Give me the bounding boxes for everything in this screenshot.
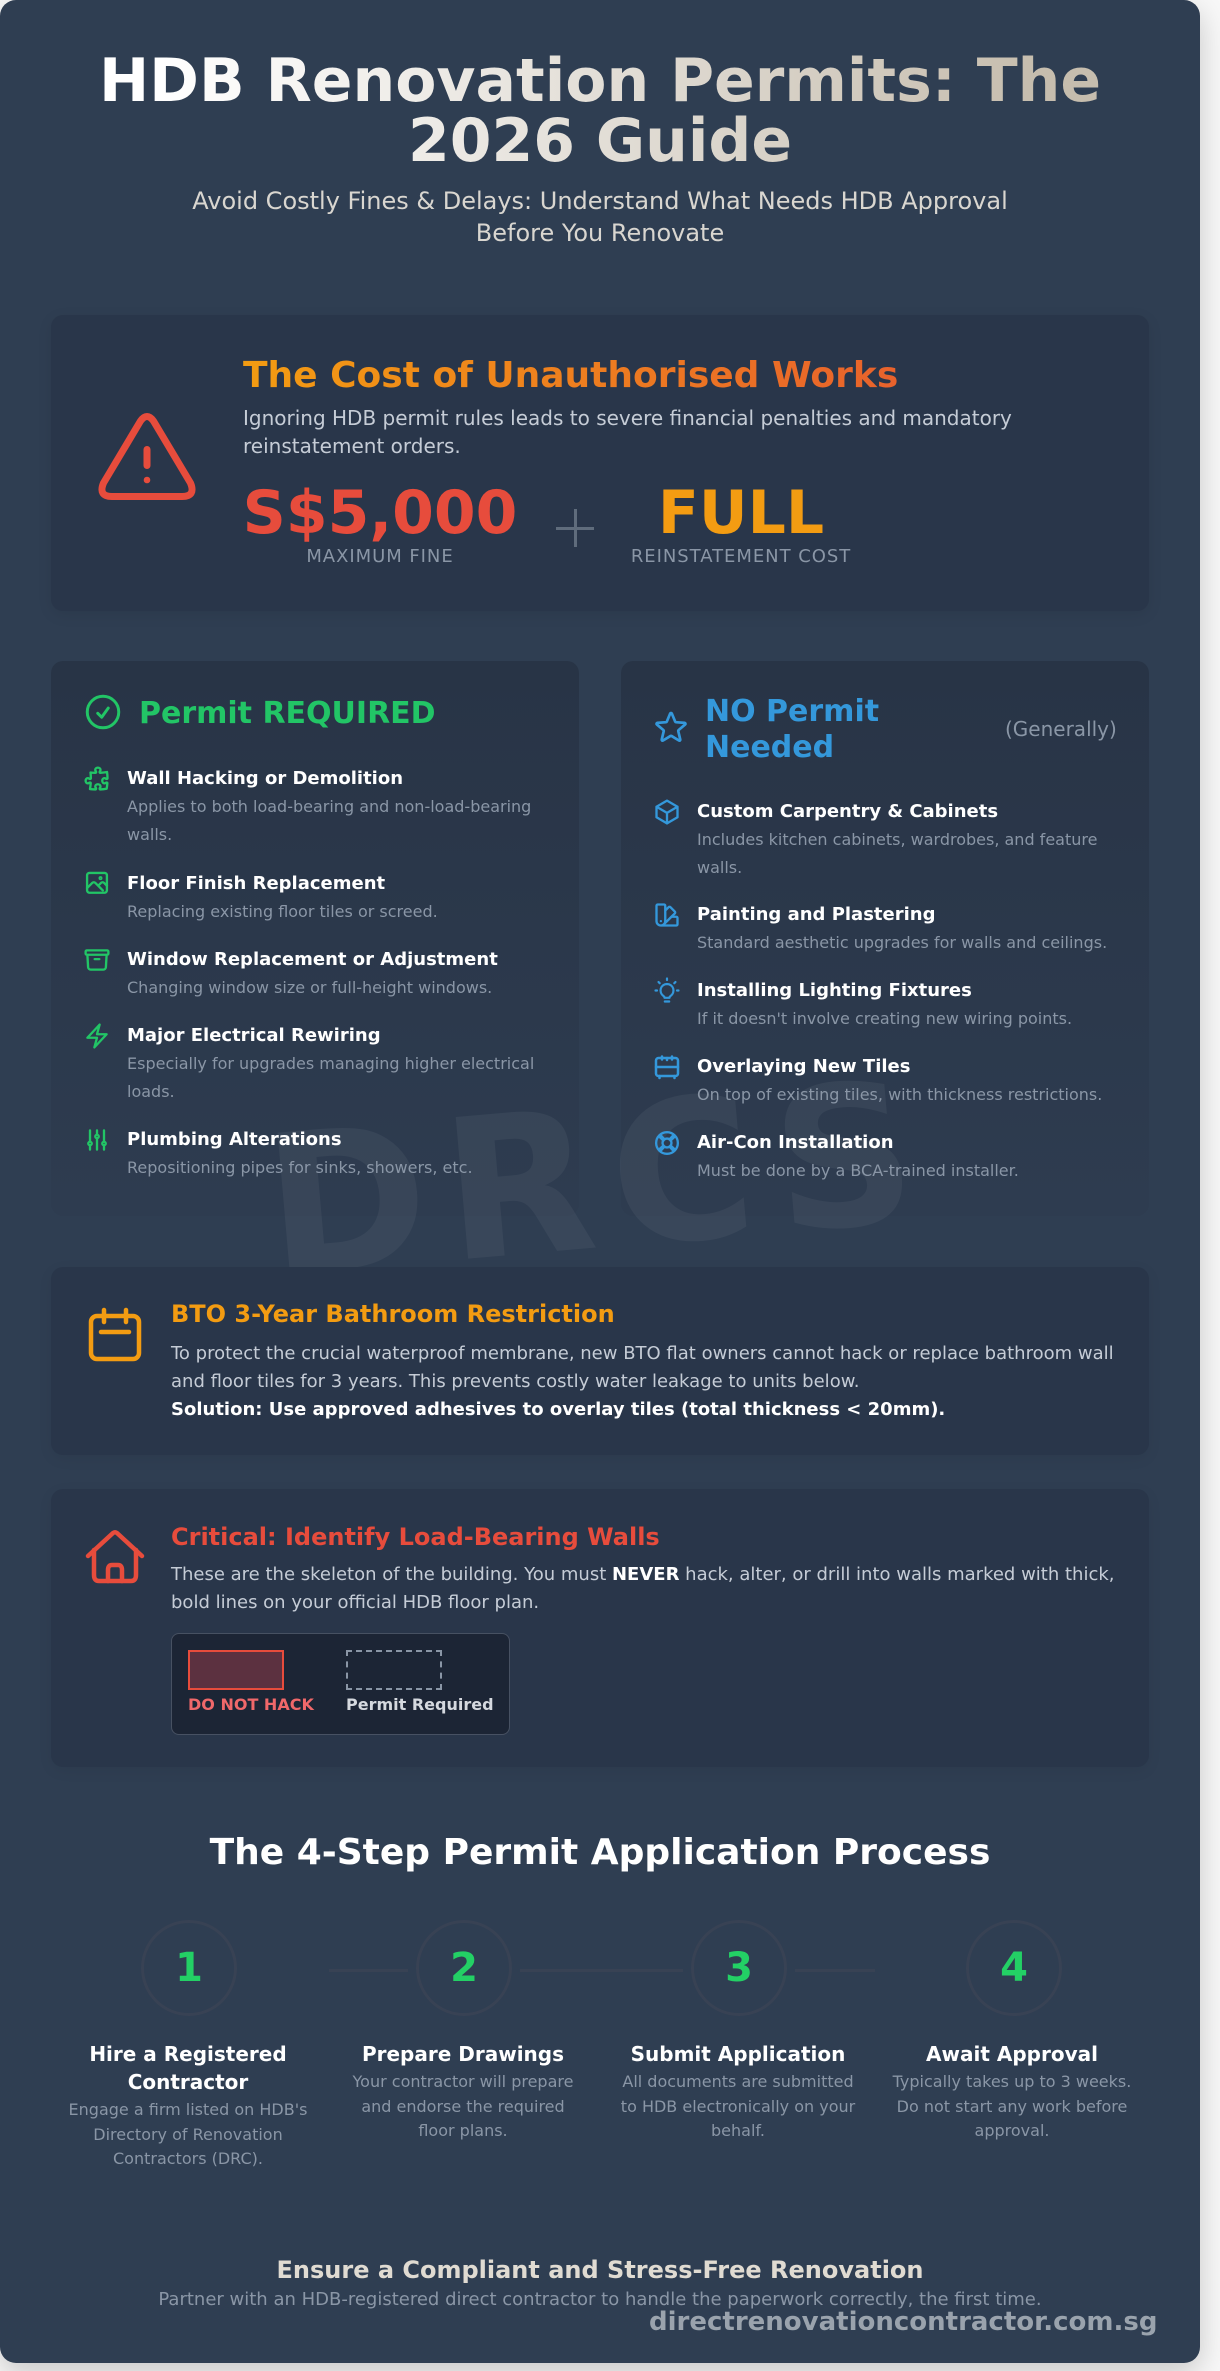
text: BTO body: To protect the crucial waterproof membrane, new BTO flat owners cannot hack or replace bathroom wall	[171, 1343, 1114, 1364]
step 1 description	[69, 2100, 307, 2168]
icon: warning triangle	[98, 413, 196, 500]
item: wall hacking: Applies to both load-bearing and non-load-bearing	[127, 797, 531, 816]
step 1 number: 1	[175, 1945, 203, 1991]
item: plumbing: Repositioning pipes for sinks, showers, etc.	[127, 1158, 473, 1177]
item: window replacement	[84, 949, 498, 997]
item: wall hacking	[84, 766, 531, 844]
item: painting: Painting and Plastering	[697, 904, 935, 925]
step 4 title: Await Approval	[926, 2042, 1098, 2066]
icon: check circle	[86, 694, 120, 730]
stat: full reinstatement cost: FULL	[658, 478, 824, 548]
item: overlaying tiles: On top of existing tiles, with thickness restrictions.	[697, 1085, 1102, 1104]
title: 2026 Guide	[408, 106, 792, 176]
step 1 number	[141, 1920, 237, 2016]
text: cost description: Ignoring HDB permit rules leads to severe financial penalties and mandatory	[243, 406, 1012, 430]
stat: full reinstatement cost: REINSTATEMENT COST	[631, 546, 851, 567]
step 3	[621, 1920, 856, 2140]
step 2 description: and endorse the required	[361, 2096, 565, 2116]
step 1	[69, 1920, 307, 2168]
step 4 number	[966, 1920, 1062, 2016]
item: overlaying tiles: Overlaying New Tiles	[697, 1056, 910, 1077]
step 3 description	[621, 2072, 856, 2140]
step 3 number: 3	[725, 1945, 753, 1991]
item: air-con: Air-Con Installation	[697, 1132, 894, 1153]
item: lighting: Installing Lighting Fixtures	[697, 980, 972, 1001]
item: lighting: If it doesn't involve creating new wiring points.	[697, 1009, 1072, 1028]
item: plumbing: Plumbing Alterations	[127, 1129, 342, 1150]
step 1 description: Directory of Renovation	[93, 2124, 283, 2144]
text: load-bearing body: bold lines on your official HDB floor plan.	[171, 1592, 539, 1613]
step 2 number: 2	[450, 1945, 478, 1991]
heading: no permit needed: Needed	[705, 730, 834, 764]
panel: BTO restriction	[51, 1267, 1149, 1455]
step 4 description: approval.	[975, 2121, 1049, 2140]
text: BTO body: and floor tiles for 3 years. This prevents costly water leakage to units below.	[171, 1371, 860, 1392]
subtitle: Before You Renovate	[476, 219, 724, 247]
item: carpentry: Custom Carpentry & Cabinets	[697, 801, 998, 822]
step 2 description: floor plans.	[418, 2121, 508, 2140]
icon: calendar	[88, 1308, 142, 1362]
item: floor finish	[86, 872, 438, 921]
footer text: Partner with an HDB-registered direct contractor to handle the paperwork correctly, the first time.	[158, 2289, 1042, 2310]
legend: dashed wall swatch	[346, 1650, 442, 1690]
step 2 number	[416, 1920, 512, 2016]
website watermark: directrenovationcontractor.com.sg	[649, 2307, 1157, 2337]
text: cost description: reinstatement orders.	[243, 434, 461, 458]
legend: solid wall swatch	[188, 1650, 284, 1690]
text: generally: (Generally)	[1005, 717, 1117, 741]
title: HDB Renovation Permits: The	[99, 46, 1101, 116]
step 3 description: to HDB electronically on your	[621, 2096, 855, 2116]
text: load-bearing body: These are the skeleton of the building. You must NEVER hack, alter, or drill into walls marked with thick,	[171, 1564, 1114, 1585]
step 4 number: 4	[1000, 1945, 1028, 1991]
heading: no permit needed	[705, 694, 879, 764]
subtitle	[192, 187, 1008, 247]
heading: process: The 4-Step Permit Application Process	[210, 1832, 990, 1873]
item: electrical rewiring: Major Electrical Rewiring	[127, 1025, 381, 1046]
panel: cost of unauthorised works	[51, 315, 1149, 611]
item: wall hacking: Wall Hacking or Demolition	[127, 768, 403, 789]
plus sign	[556, 509, 594, 547]
step 4 description	[892, 2072, 1131, 2140]
step 1 title	[89, 2042, 287, 2094]
panel: no permit needed	[621, 661, 1149, 1216]
panel: permit required	[51, 661, 579, 1216]
item: window replacement: Changing window size or full-height windows.	[127, 978, 492, 997]
text: BTO body: Solution: Use approved adhesives to overlay tiles (total thickness < 20mm).	[171, 1399, 945, 1420]
step 4	[892, 1920, 1131, 2140]
legend box	[171, 1633, 510, 1735]
stat: maximum fine: S$5,000	[243, 478, 517, 548]
heading: no permit needed: NO Permit	[705, 694, 879, 728]
title	[50, 51, 1150, 171]
step 3 title: Submit Application	[631, 2042, 845, 2066]
heading: permit required: Permit REQUIRED	[139, 696, 436, 730]
text: load-bearing body	[170, 1564, 1114, 1613]
step 4 description: Do not start any work before	[897, 2096, 1127, 2116]
item: electrical rewiring: loads.	[127, 1082, 175, 1101]
text: cost description	[243, 406, 1012, 458]
watermark: DRCS	[256, 1037, 941, 1322]
item: carpentry	[655, 800, 1097, 877]
step 3 number	[691, 1920, 787, 2016]
step 1 title: Hire a Registered	[89, 2042, 287, 2066]
item: floor finish: Floor Finish Replacement	[127, 873, 385, 894]
step 3 description: behalf.	[711, 2121, 765, 2140]
stat: full reinstatement cost	[631, 478, 851, 567]
item: air-con	[655, 1131, 1019, 1180]
item: lighting	[654, 977, 1072, 1028]
item: carpentry: Includes kitchen cabinets, wardrobes, and feature	[697, 830, 1097, 849]
footer heading: Ensure a Compliant and Stress-Free Renovation	[276, 2256, 924, 2284]
step 4 description: Typically takes up to 3 weeks.	[893, 2072, 1131, 2091]
subtitle: Avoid Costly Fines & Delays: Understand What Needs HDB Approval	[192, 187, 1008, 215]
step 2 title: Prepare Drawings	[362, 2042, 564, 2066]
connector lines	[329, 1969, 875, 1972]
step 2 description: Your contractor will prepare	[353, 2072, 573, 2091]
item: floor finish: Replacing existing floor tiles or screed.	[127, 902, 438, 921]
step 1 description: Engage a firm listed on HDB's	[69, 2100, 307, 2119]
item: electrical rewiring	[86, 1023, 534, 1101]
legend: do not hack label: DO NOT HACK	[188, 1695, 314, 1714]
item: window replacement: Window Replacement or Adjustment	[127, 949, 498, 970]
heading: load-bearing walls: Critical: Identify Load-Bearing Walls	[171, 1523, 660, 1551]
item: painting	[655, 903, 1107, 952]
stat: maximum fine: MAXIMUM FINE	[306, 546, 454, 567]
step 1 title: Contractor	[128, 2070, 248, 2094]
item: painting: Standard aesthetic upgrades for walls and ceilings.	[697, 933, 1107, 952]
icon: house	[86, 1530, 144, 1584]
text: BTO body	[170, 1343, 1114, 1420]
step 2 description	[352, 2072, 573, 2140]
item: overlaying tiles	[654, 1055, 1102, 1104]
legend: permit required label: Permit Required	[346, 1695, 494, 1714]
panel: load-bearing walls	[51, 1489, 1149, 1767]
item: air-con: Must be done by a BCA-trained installer.	[697, 1161, 1019, 1180]
item: plumbing	[87, 1129, 473, 1177]
item: carpentry: walls.	[697, 858, 742, 877]
step 2	[352, 1920, 573, 2140]
step 1 description: Contractors (DRC).	[113, 2149, 263, 2168]
item: wall hacking: walls.	[127, 825, 172, 844]
heading: BTO restriction: BTO 3-Year Bathroom Restriction	[171, 1300, 615, 1328]
step 3 description: All documents are submitted	[622, 2072, 854, 2091]
icon: star	[655, 712, 687, 742]
heading: cost of unauthorised works: The Cost of Unauthorised Works	[243, 354, 898, 396]
item: electrical rewiring: Especially for upgrades managing higher electrical	[127, 1054, 534, 1073]
